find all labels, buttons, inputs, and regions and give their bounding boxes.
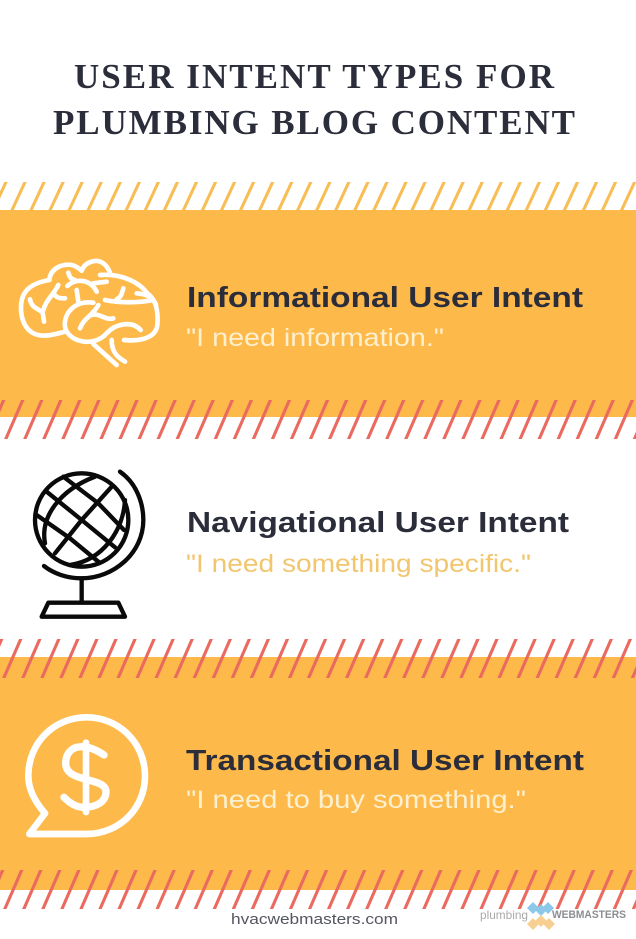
panel: informational <box>0 182 636 417</box>
footer url: hvacwebmasters.com <box>231 911 398 928</box>
quote: "I need information." <box>186 324 444 352</box>
logo: plumbing webmasters <box>480 902 626 930</box>
icon: brain <box>21 261 158 365</box>
quote: "I need something specific." <box>186 550 531 578</box>
title: USER INTENT TYPES FOR <box>74 57 555 96</box>
panel: navigational <box>35 472 569 617</box>
heading: Informational User Intent <box>187 282 583 314</box>
stripes: below informational <box>0 400 636 439</box>
logo: plumbing webmasters: WEBMASTERS <box>552 909 626 921</box>
icon: logo diamonds <box>527 902 555 930</box>
heading: Transactional User Intent <box>186 745 584 777</box>
title <box>53 57 575 142</box>
quote: "I need to buy something." <box>186 786 526 814</box>
icon: globe <box>35 472 143 617</box>
icon: dollar speech bubble <box>28 717 145 834</box>
stripes: top <box>0 182 636 210</box>
heading: Navigational User Intent <box>187 507 569 539</box>
stripes: above transactional <box>0 639 636 678</box>
title: PLUMBING BLOG CONTENT <box>53 103 575 142</box>
panel: transactional <box>0 639 636 890</box>
logo: plumbing webmasters: plumbing <box>480 908 528 922</box>
stripes: bottom <box>0 870 636 909</box>
